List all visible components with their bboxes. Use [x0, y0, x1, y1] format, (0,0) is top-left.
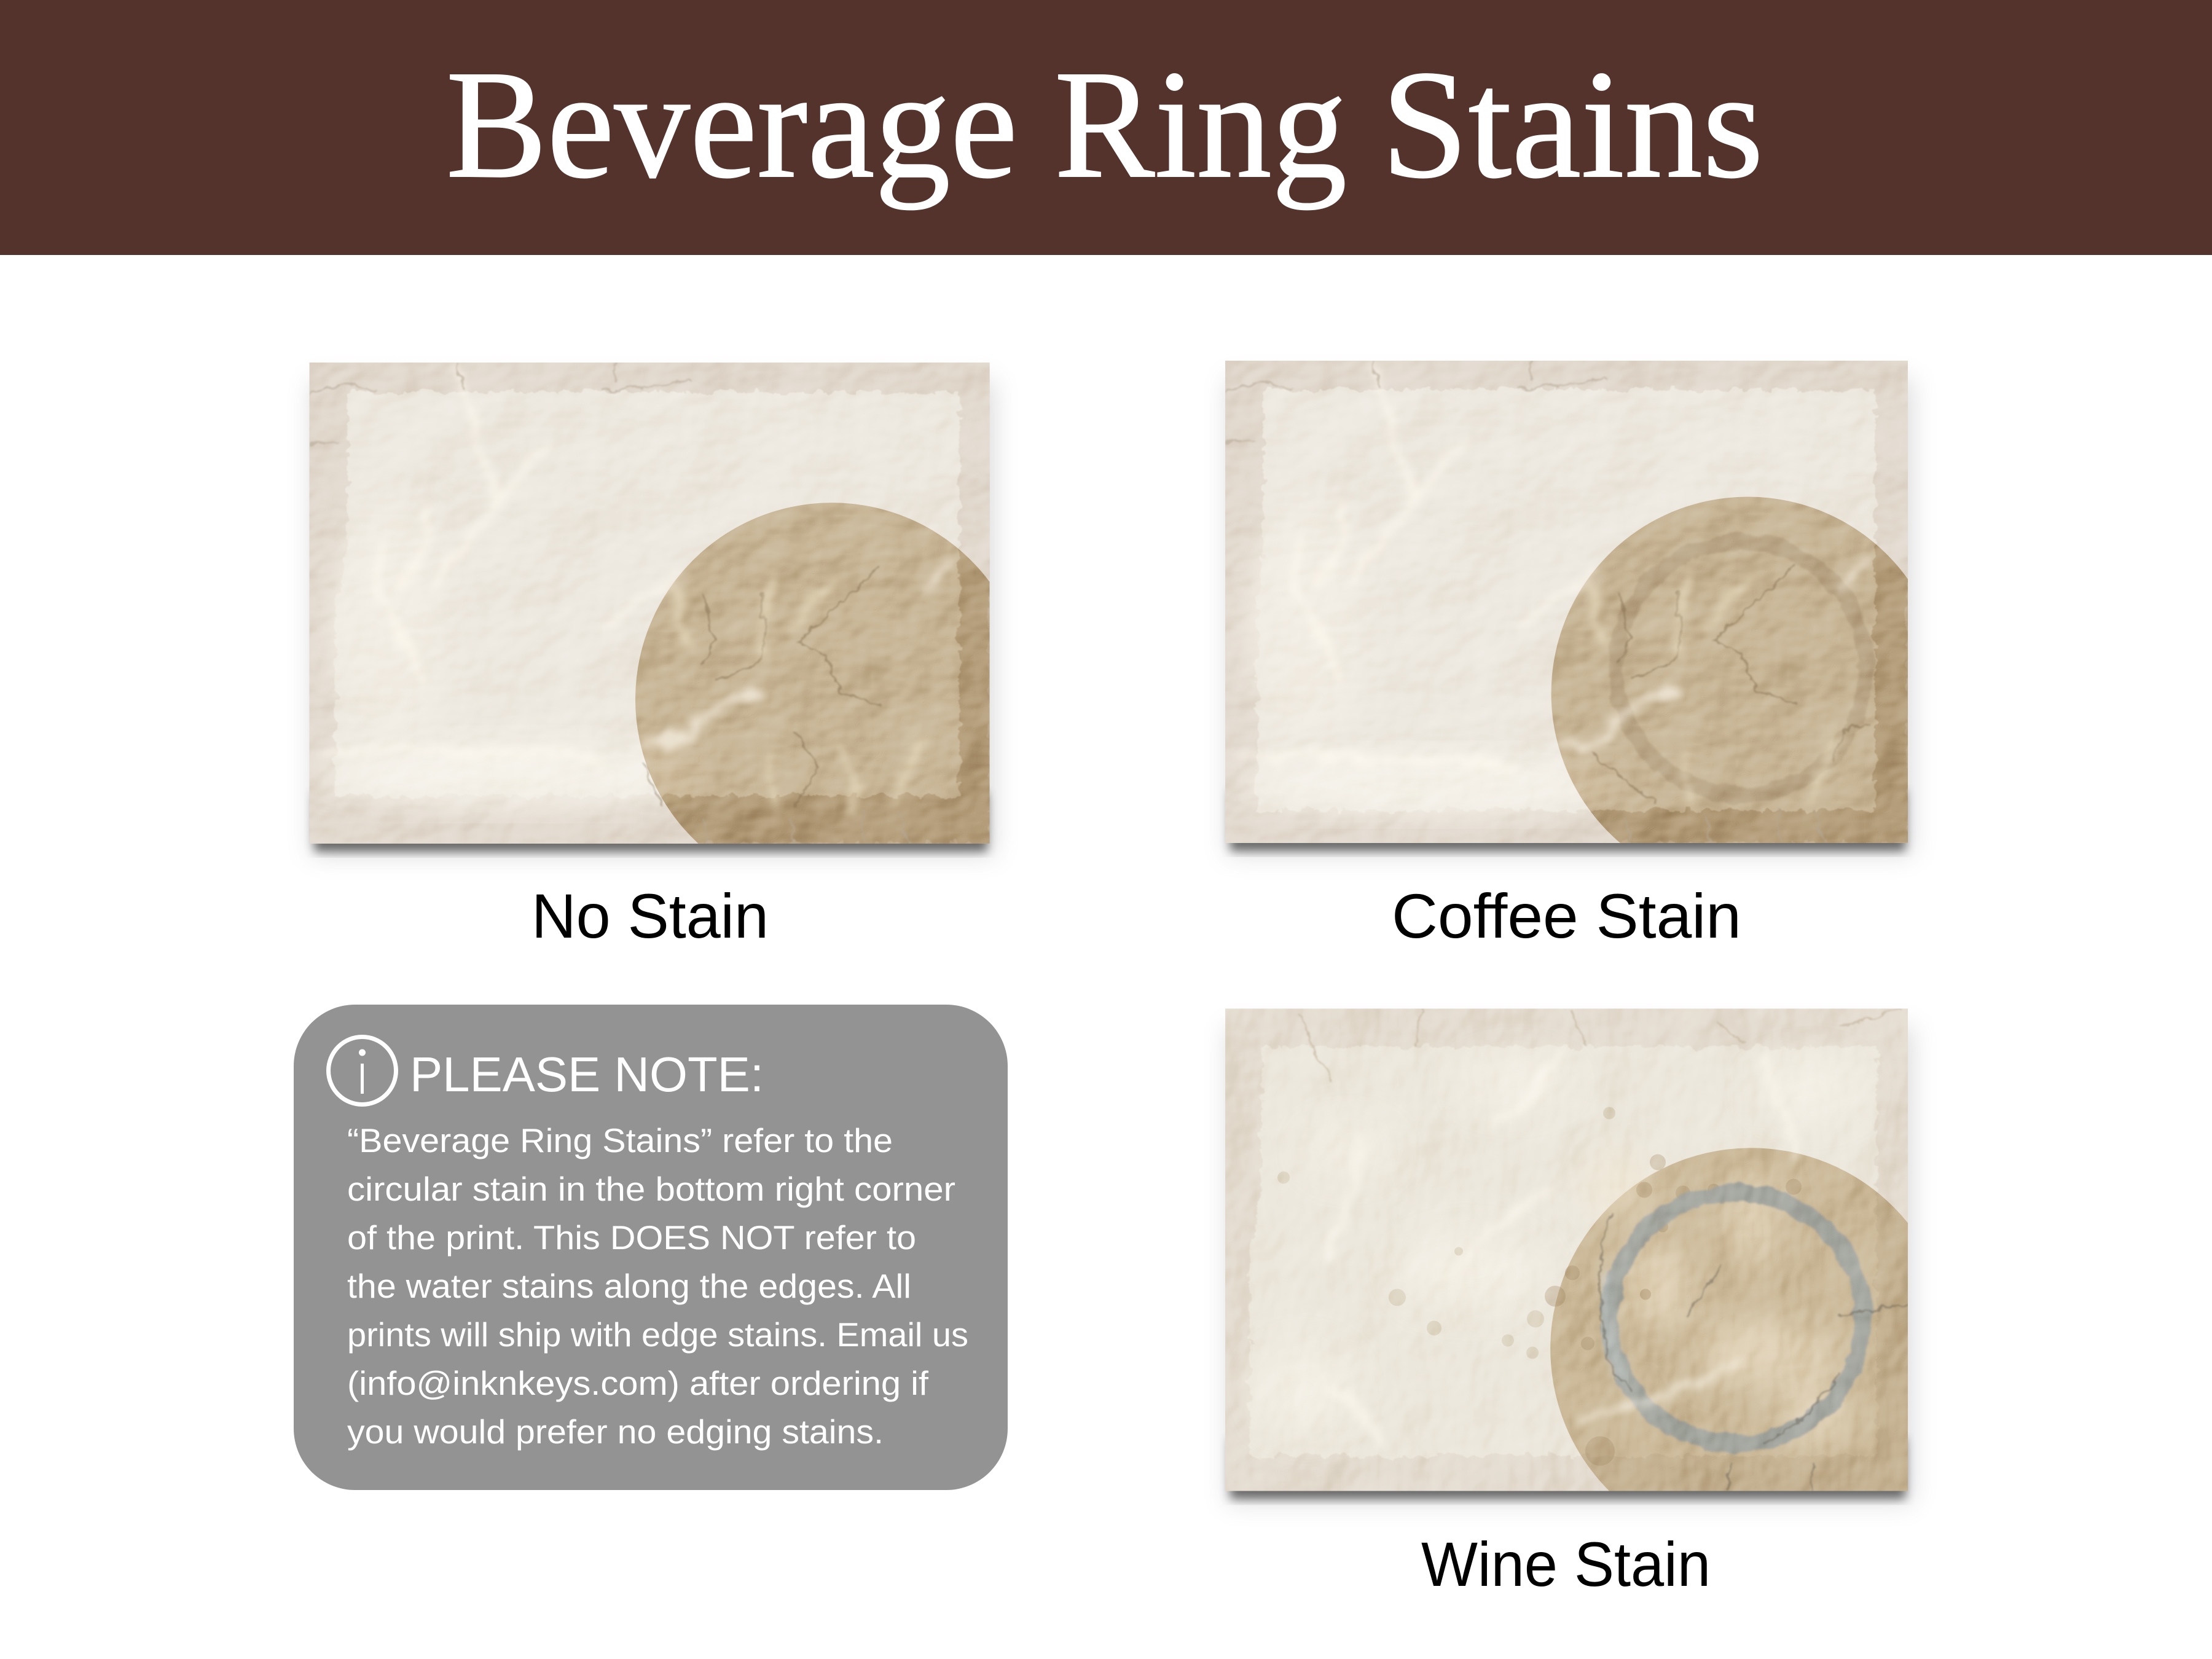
- paper sheet: [310, 363, 990, 844]
- stain spots: [1545, 1154, 1802, 1466]
- callout body text: “Beverage Ring Stains” refer to the: [347, 1121, 893, 1159]
- fold lines: [1299, 1009, 1901, 1083]
- top fold lines: [1225, 361, 1824, 843]
- crumple texture: [1225, 1009, 1908, 1491]
- paper shadow: [1228, 1027, 1912, 1503]
- coffee ring: [1617, 542, 1866, 795]
- stain creases: [1594, 566, 1870, 803]
- stain darker outer band: [1225, 361, 1908, 843]
- paper shadow: [1228, 379, 1912, 855]
- water-stained inner area: [1257, 390, 1875, 810]
- crease highlights: [1237, 365, 1870, 769]
- stain circle: [635, 503, 990, 844]
- pale blotches: [1256, 1058, 1864, 1433]
- callout heading: PLEASE NOTE:: [410, 1047, 764, 1102]
- stain circle: [1550, 1148, 1908, 1491]
- title: [446, 38, 1763, 210]
- title: Stains: [1381, 38, 1763, 210]
- panel: no stain paper: [310, 363, 994, 855]
- stain pale patches: [1588, 1156, 1852, 1445]
- callout body text: of the print. This DOES NOT refer to: [347, 1218, 916, 1257]
- top fold lines: [310, 363, 909, 844]
- stain creases: [641, 568, 881, 805]
- icon: info circle: [328, 1037, 396, 1105]
- panel: coffee stain paper: [1225, 361, 1912, 855]
- paper sheet: [1225, 1009, 1908, 1491]
- callout background: [294, 1005, 1008, 1490]
- water-stained inner area: [1250, 1047, 1877, 1456]
- stain darker outer band: [661, 549, 989, 844]
- water-stained inner area: [335, 392, 960, 796]
- panel: please note callout: [294, 1005, 1008, 1490]
- label: coffee stain: Coffee Stain: [1392, 881, 1741, 951]
- paper sheet: [1225, 361, 1908, 843]
- panel: wine stain paper: [1225, 1009, 1912, 1503]
- crease highlights: [1330, 1046, 1797, 1439]
- callout body text: (info@inknkeys.com) after ordering if: [347, 1364, 929, 1402]
- crease lines: [1599, 1212, 1908, 1491]
- callout body text: prints will ship with edge stains. Email us: [347, 1316, 968, 1354]
- paper shadow: [312, 381, 994, 855]
- label: wine stain: Wine Stain: [1421, 1529, 1711, 1599]
- crease highlights: [322, 367, 954, 762]
- title: Ring: [1054, 38, 1347, 210]
- callout body text: you would prefer no edging stains.: [347, 1413, 884, 1451]
- wine ring: [1605, 1193, 1863, 1444]
- stain circle: [1551, 496, 1908, 843]
- title: Beverage: [446, 38, 1018, 210]
- label: no stain: No Stain: [531, 881, 769, 951]
- crumple texture: [1225, 361, 1908, 843]
- callout body text: circular stain in the bottom right corner: [347, 1170, 955, 1208]
- tea spots: [1277, 1107, 1615, 1359]
- header band: [0, 0, 2212, 255]
- crumple texture: [310, 363, 990, 844]
- callout body text: the water stains along the edges. All: [347, 1267, 911, 1305]
- callout body text: [347, 1121, 968, 1451]
